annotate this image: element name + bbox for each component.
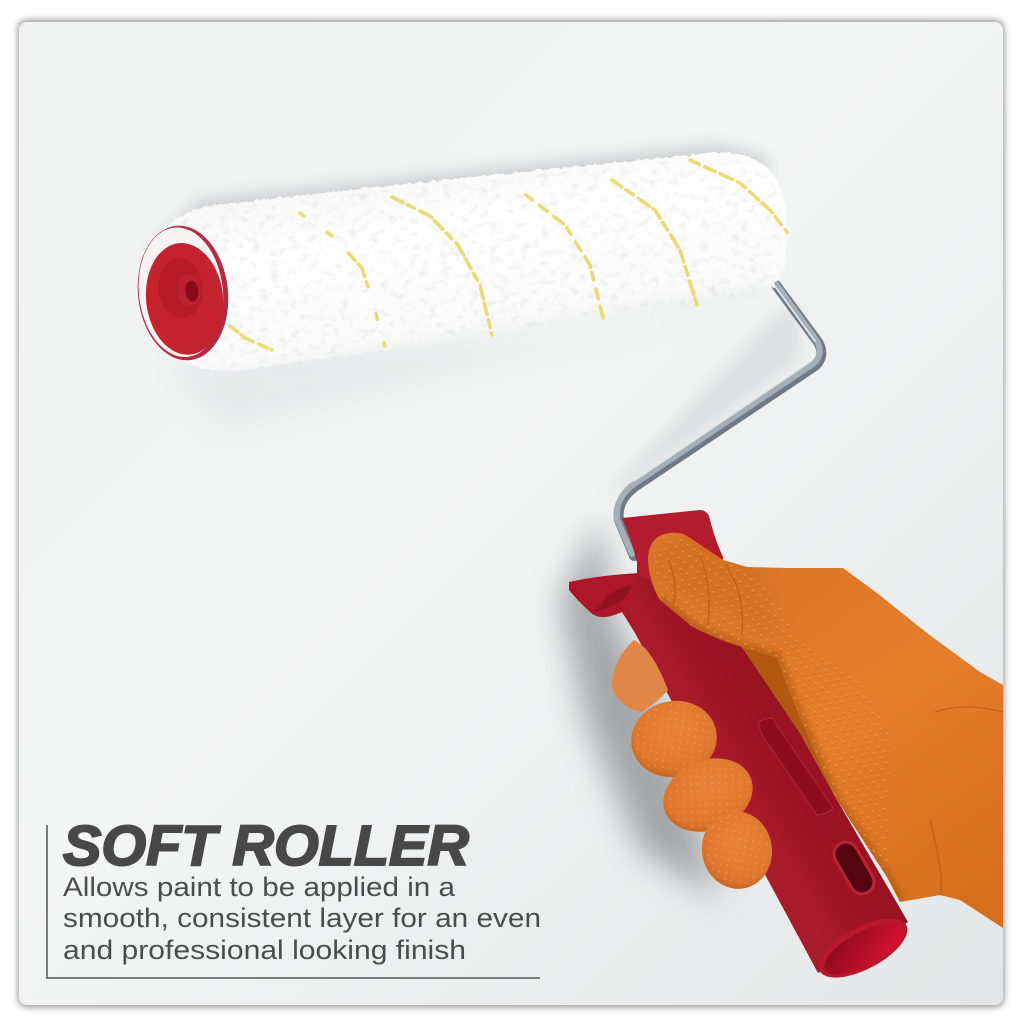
glove folds bbox=[668, 555, 1003, 895]
handle opening bbox=[824, 924, 904, 974]
description text: and professional looking finish bbox=[63, 935, 466, 965]
yellow stripes on sleeve bbox=[230, 160, 787, 350]
description text bbox=[63, 872, 541, 965]
roller handle top flanges bbox=[569, 510, 723, 633]
sleeve pile texture bbox=[155, 157, 783, 366]
caption frame bbox=[47, 825, 540, 978]
glove hand bbox=[648, 533, 1003, 928]
handle tube bbox=[628, 575, 916, 990]
glove grip dots bbox=[650, 534, 890, 880]
handle oval hole bbox=[832, 840, 876, 896]
fingers behind glove palm bbox=[742, 647, 837, 800]
wire frame of roller bbox=[617, 284, 821, 556]
roller sleeve bbox=[131, 153, 787, 371]
description text: smooth, consistent layer for an even bbox=[63, 903, 541, 933]
handle rim bbox=[818, 918, 908, 978]
orange glove bbox=[612, 530, 1003, 928]
sleeve body bbox=[147, 153, 787, 371]
description text: Allows paint to be applied in a bbox=[63, 872, 456, 902]
roller end cap bbox=[138, 226, 228, 360]
shadow: roller and handle on wall bbox=[150, 145, 800, 900]
title: SOFT ROLLER bbox=[63, 814, 469, 878]
handle grip recess bbox=[758, 718, 833, 815]
glove fingers bbox=[612, 640, 778, 894]
glove shading bbox=[660, 560, 904, 902]
